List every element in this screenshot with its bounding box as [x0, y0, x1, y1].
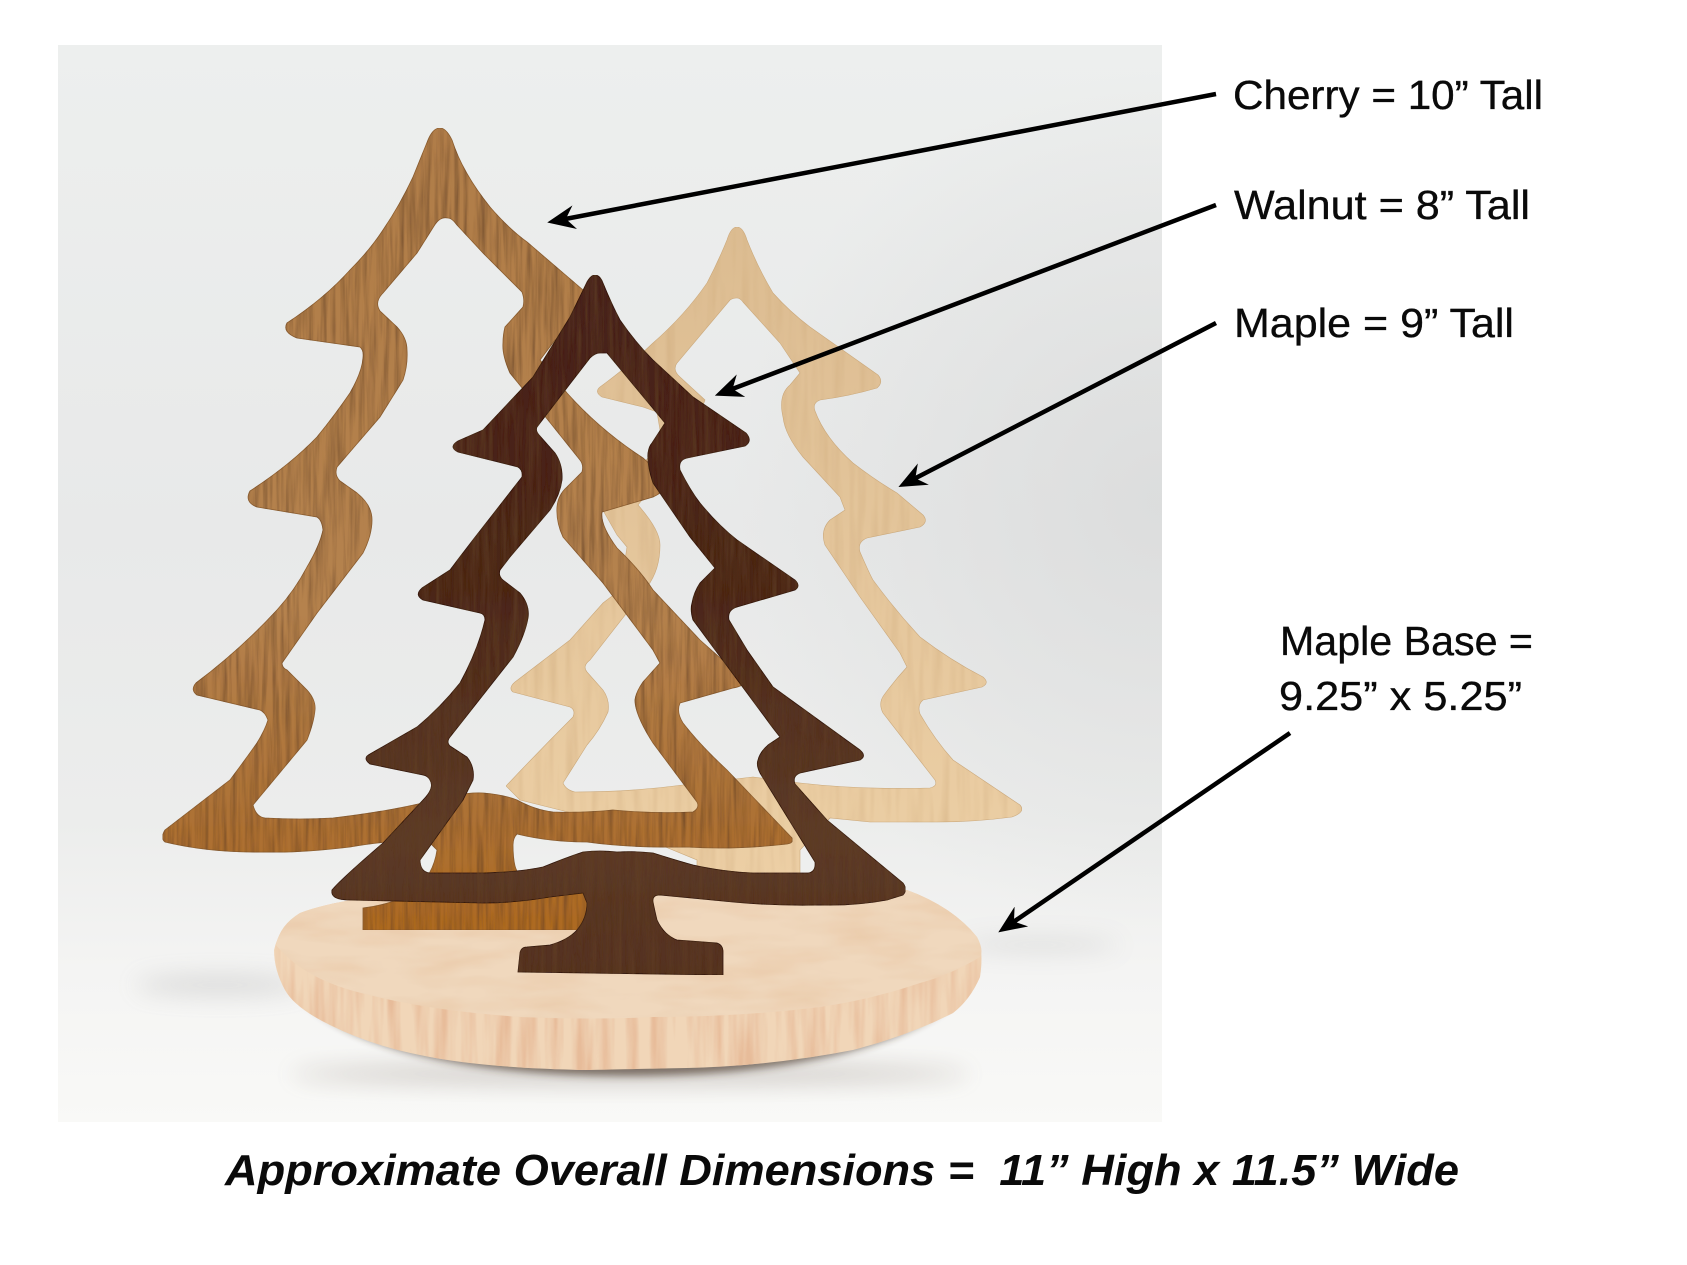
label: maple base size — [1279, 618, 1533, 719]
label: maple base size: 9.25” x 5.25” — [1279, 673, 1522, 719]
label: cherry height: Cherry = 10” Tall — [1233, 72, 1543, 118]
maple base — [274, 880, 981, 1076]
arrow: cherry — [560, 94, 1216, 220]
label: walnut height: Walnut = 8” Tall — [1234, 182, 1530, 228]
maple tree — [506, 227, 1022, 880]
arrow: maple — [910, 323, 1216, 481]
photo panel: three wooden trees on a maple base — [58, 45, 1162, 1122]
arrow: maple base — [1009, 733, 1290, 925]
walnut tree — [332, 275, 906, 975]
arrow: walnut — [727, 205, 1216, 391]
label: maple base size: Maple Base = — [1280, 618, 1533, 664]
caption: overall dimensions: Approximate Overall Dimensions = 11” High x 11.5” Wide — [224, 1146, 1459, 1195]
cherry tree — [162, 128, 792, 930]
label: maple height: Maple = 9” Tall — [1234, 300, 1514, 346]
